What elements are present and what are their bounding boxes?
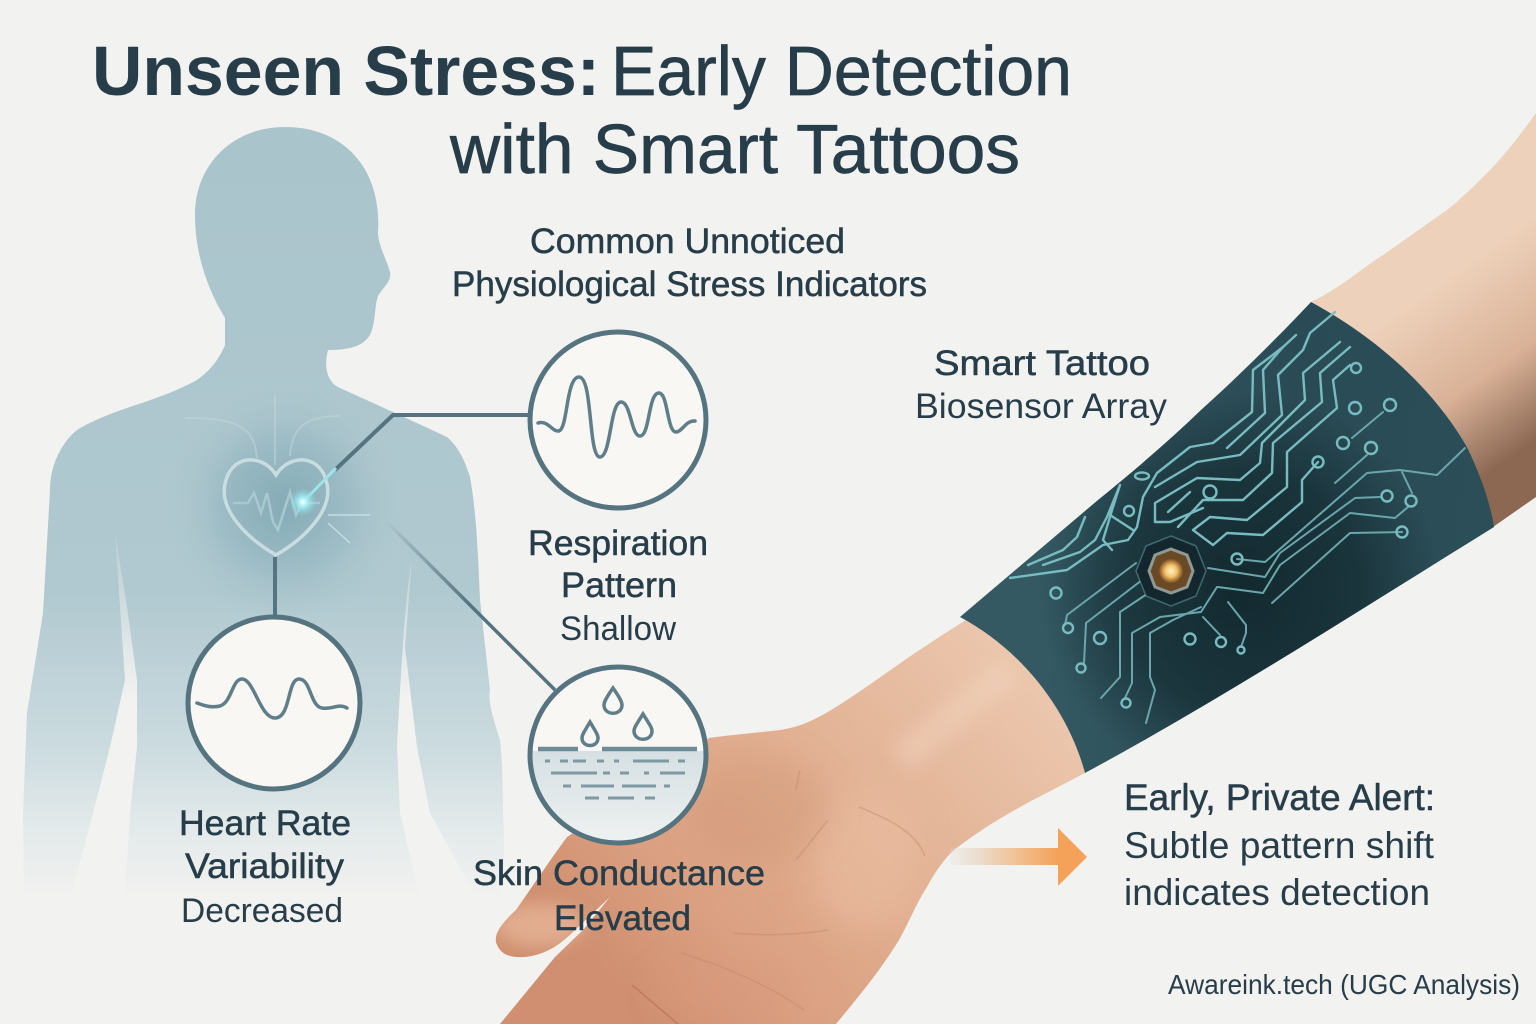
subtitle: common unnoticed indicators: Common Unnoticed — [530, 222, 845, 261]
label: respiration pattern — [528, 524, 708, 648]
label: heart rate variability: Decreased — [181, 892, 343, 930]
source credit: Awareink.tech (UGC Analysis) — [1168, 969, 1520, 1000]
title: Unseen Stress: — [92, 32, 600, 110]
callout: early private alert — [1124, 777, 1435, 913]
label: skin conductance: Elevated — [554, 899, 691, 938]
central sensor — [1136, 536, 1206, 606]
forearm and hand — [495, 113, 1536, 1024]
smart tattoo band — [960, 302, 1494, 773]
title: Early Detection — [611, 32, 1072, 110]
label: skin conductance — [473, 854, 765, 938]
connector: heart to respiration — [335, 415, 528, 470]
connector: heart to skin conductance — [385, 520, 555, 690]
callout: early private alert: Subtle pattern shift — [1124, 825, 1435, 866]
label: smart tattoo — [915, 344, 1167, 426]
subtitle: common unnoticed indicators — [452, 222, 927, 304]
heart icon with pulse — [224, 460, 328, 555]
callout: early private alert: Early, Private Alert: — [1124, 777, 1435, 818]
human body silhouette — [23, 127, 504, 900]
circuit traces right and lower — [1065, 412, 1465, 723]
label: smart tattoo: Biosensor Array — [915, 387, 1167, 426]
subtitle: common unnoticed indicators: Physiological Stress Indicators — [452, 265, 927, 304]
circuit nodes — [1050, 363, 1416, 708]
title — [92, 32, 1072, 188]
indicator: respiration pattern circle — [530, 332, 706, 508]
label: heart rate variability — [179, 804, 351, 930]
arrow: orange alert — [950, 828, 1087, 886]
label: respiration pattern: Respiration — [528, 524, 708, 563]
connector: heart to heart rate variability — [273, 557, 277, 618]
callout: early private alert: indicates detection — [1124, 872, 1430, 913]
label: smart tattoo: Smart Tattoo — [934, 344, 1150, 383]
indicator: heart rate variability circle — [188, 617, 360, 789]
indicator: skin conductance circle — [530, 667, 706, 847]
label: respiration pattern: Pattern — [561, 566, 677, 605]
title: with Smart Tattoos — [449, 110, 1020, 188]
glowing sensor spark — [289, 468, 370, 543]
label: heart rate variability: Variability — [185, 847, 345, 886]
label: respiration pattern: Shallow — [560, 610, 676, 648]
label: heart rate variability: Heart Rate — [179, 804, 351, 843]
circuit traces upper — [1010, 312, 1350, 578]
label: skin conductance: Skin Conductance — [473, 854, 765, 893]
